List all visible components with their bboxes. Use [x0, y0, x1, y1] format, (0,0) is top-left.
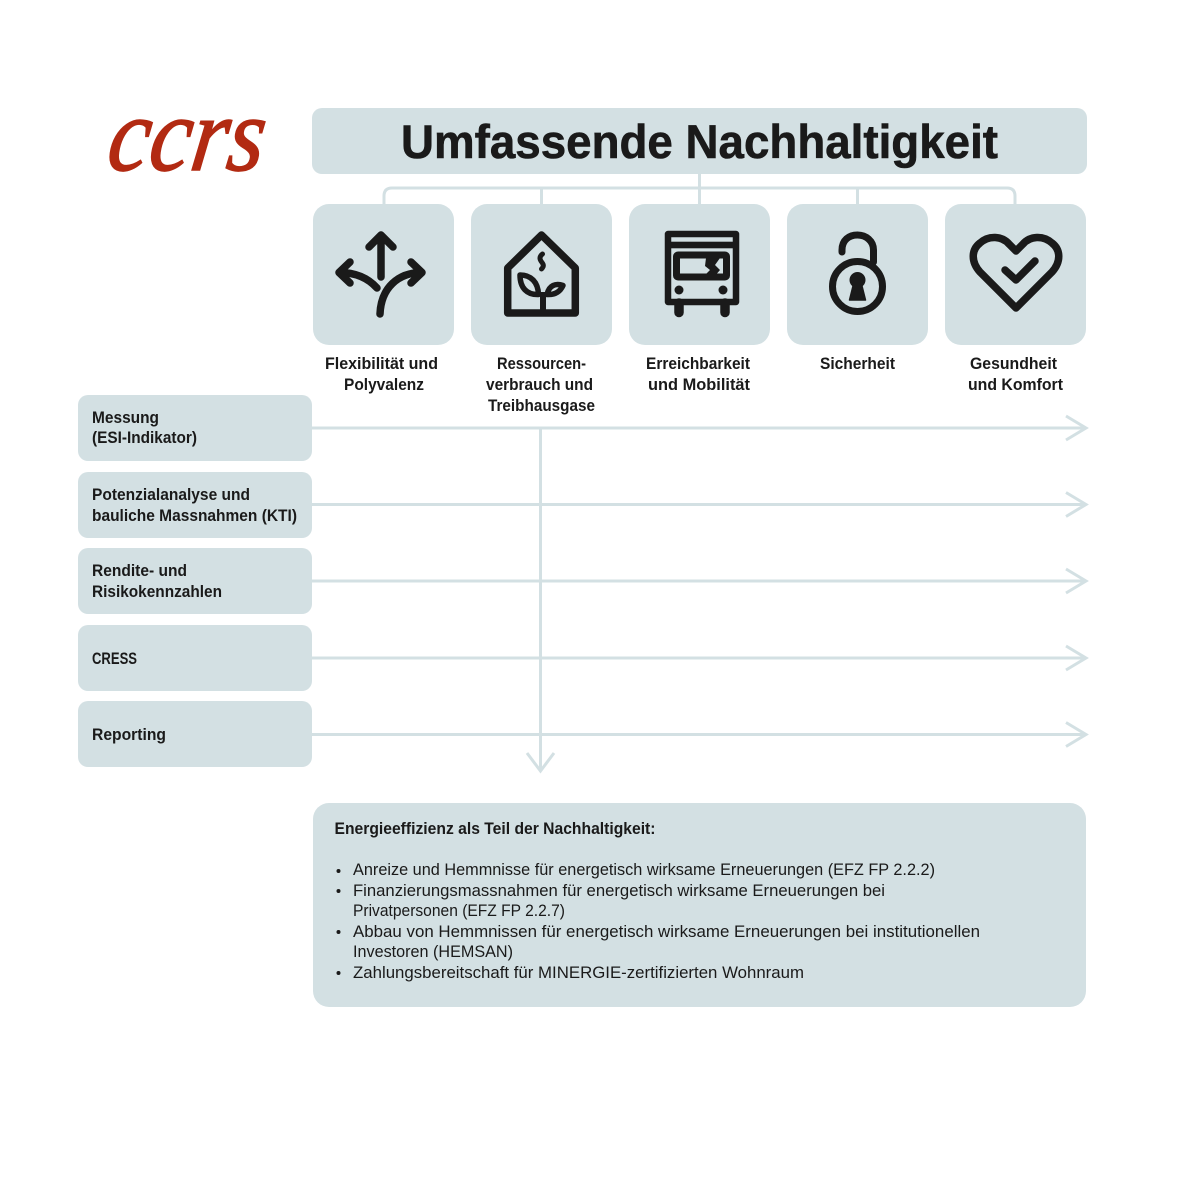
arrow: row 2	[312, 492, 1086, 516]
panel: Erreichbarkeit und Mobilität	[629, 204, 770, 345]
label: Erreichbarkeit und Mobilität	[646, 355, 750, 394]
panel: Flexibilität und Polyvalenz	[313, 204, 454, 345]
row: Reporting	[78, 701, 312, 767]
bullet list: Anreize und Hemmnisse für energetisch wirksame Erneuerungen (EFZ FP 2.2.2)	[353, 860, 935, 879]
label: Ressourcenverbrauch und Treibhausgase	[486, 355, 595, 415]
icon: greenhouse with plant	[508, 235, 575, 313]
arrow: row 3	[312, 569, 1086, 593]
icon: open padlock	[832, 235, 882, 312]
row: Messung (ESI-Indikator): (ESI-Indikator)	[92, 429, 197, 447]
panel: Gesundheit und Komfort	[945, 204, 1086, 345]
bullet list: Privatpersonen (EFZ FP 2.2.7)	[353, 901, 565, 920]
panel: Ressourcenverbrauch und Treibhausgase	[471, 204, 612, 345]
arrow: row 1	[312, 416, 1086, 440]
label: Ressourcenverbrauch und Treibhausgase: verbrauch und	[486, 376, 593, 394]
icon: heart with check	[973, 237, 1059, 308]
title banner: Umfassende Nachhaltigkeit	[401, 115, 998, 168]
row: Rendite- und Risikokennzahlen: Risikokennzahlen	[92, 583, 222, 601]
arrow: row 5	[312, 722, 1086, 746]
row: Messung (ESI-Indikator)	[78, 395, 312, 461]
row: Rendite- und Risikokennzahlen	[78, 548, 312, 614]
label: Gesundheit und Komfort	[968, 355, 1063, 394]
bullet list: Zahlungsbereitschaft für MINERGIE-zertifizierten Wohnraum	[353, 963, 804, 982]
label: Flexibilität und Polyvalenz: Polyvalenz	[344, 376, 424, 394]
bullet list: Finanzierungsmassnahmen für energetisch wirksame Erneuerungen bei	[353, 881, 885, 900]
row: Rendite- und Risikokennzahlen: Rendite- und	[92, 562, 187, 580]
logo: ccrs: ccrs	[102, 76, 274, 194]
label: Flexibilität und Polyvalenz	[325, 355, 438, 394]
bullet list: Abbau von Hemmnissen für energetisch wirksame Erneuerungen bei institutionellen	[353, 922, 980, 941]
label: Erreichbarkeit und Mobilität: und Mobilität	[648, 376, 750, 394]
panel: Energieeffizienz als Teil der Nachhaltigkeit	[313, 803, 1086, 1007]
row: Messung (ESI-Indikator): Messung	[92, 409, 159, 427]
label: Gesundheit und Komfort: und Komfort	[968, 376, 1063, 394]
panel heading: Energieeffizienz als Teil der Nachhaltigkeit:	[334, 820, 656, 838]
icon: diverging arrows	[339, 235, 422, 314]
row: Potenzialanalyse und bauliche Massnahmen (KTI): Potenzialanalyse und	[92, 486, 250, 504]
row: CRESS	[78, 625, 312, 691]
vertical arrow into energy efficiency panel	[527, 428, 554, 771]
label: Gesundheit und Komfort: Gesundheit	[970, 355, 1057, 373]
label: Ressourcenverbrauch und Treibhausgase: Treibhausgase	[488, 397, 595, 415]
row: Potenzialanalyse und bauliche Massnahmen (KTI)	[78, 472, 312, 538]
title banner	[312, 108, 1087, 174]
panel: Sicherheit	[787, 204, 928, 345]
connector tree from title to icons	[384, 174, 1015, 204]
icon: bus	[668, 234, 736, 312]
label: Flexibilität und Polyvalenz: Flexibilität und	[325, 355, 438, 373]
label: Erreichbarkeit und Mobilität: Erreichbarkeit	[646, 355, 750, 373]
arrow: row 4	[312, 646, 1086, 670]
row: Potenzialanalyse und bauliche Massnahmen (KTI): bauliche Massnahmen (KTI)	[92, 507, 297, 525]
bullet list	[336, 860, 980, 982]
row: CRESS: CRESS	[92, 650, 137, 668]
label: Ressourcenverbrauch und Treibhausgase: Ressourcen-	[497, 355, 586, 373]
bullet list: Investoren (HEMSAN)	[353, 942, 513, 961]
row: Reporting: Reporting	[92, 726, 166, 744]
label: Sicherheit: Sicherheit	[820, 355, 895, 373]
